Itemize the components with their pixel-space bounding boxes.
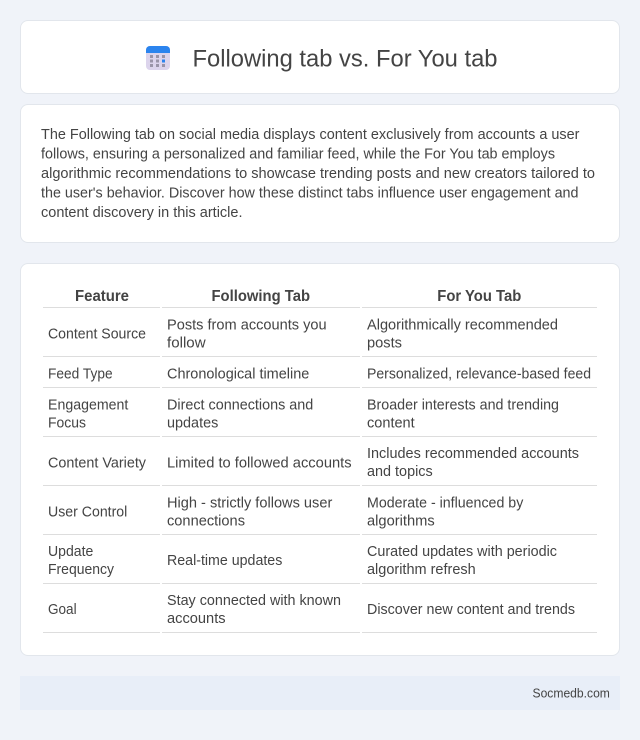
row: user control: User Control	[48, 504, 127, 520]
row: update frequency: Curated updates with periodic	[367, 544, 557, 560]
icon: calendar	[146, 46, 170, 70]
row: user control: connections	[167, 513, 245, 529]
panel: comparison table	[20, 263, 620, 656]
intro text: follows, ensuring a personalized and familiar feed, while the For You tab employs	[41, 146, 555, 162]
row: engagement focus: Broader interests and trending	[367, 397, 559, 413]
intro text: the user's behavior. Discover how these distinct tabs influence user engagement and	[41, 186, 578, 202]
title: Following tab vs. For You tab	[192, 46, 498, 72]
row: feed type: Chronological timeline	[167, 366, 309, 382]
row: content variety: Includes recommended accounts	[367, 446, 579, 462]
row: engagement focus: Direct connections and	[167, 397, 313, 413]
table header	[75, 288, 522, 305]
footer text: Socmedb.com	[532, 686, 610, 700]
intro text: The Following tab on social media displays content exclusively from accounts a user	[41, 127, 580, 143]
row: update frequency: Real-time updates	[167, 553, 282, 569]
row: update frequency: algorithm refresh	[367, 562, 476, 578]
row: user control: algorithms	[367, 513, 435, 529]
row: user control	[48, 495, 524, 529]
row: feed type	[48, 366, 591, 382]
row: goal: accounts	[167, 611, 226, 627]
panel: title card	[20, 20, 620, 94]
row: engagement focus: Focus	[48, 415, 86, 431]
row: user control: High - strictly follows user	[167, 495, 332, 511]
panel: introduction	[20, 104, 620, 243]
row: update frequency: Update	[48, 544, 93, 560]
row: content source: posts	[367, 335, 402, 351]
row: goal	[48, 593, 575, 627]
intro text	[41, 127, 595, 221]
row: content variety: Content Variety	[48, 455, 147, 471]
intro text: content discovery in this article.	[41, 205, 243, 221]
row: content variety	[48, 446, 579, 480]
row: content variety: and topics	[367, 464, 433, 480]
row: content source: Posts from accounts you	[167, 317, 327, 333]
row: content source: follow	[167, 335, 206, 351]
footer bar	[20, 676, 620, 710]
row: engagement focus: content	[367, 415, 415, 431]
row: goal: Goal	[48, 602, 77, 618]
row: update frequency	[48, 544, 557, 578]
row: feed type: Personalized, relevance-based feed	[367, 366, 591, 382]
row: feed type: Feed Type	[48, 366, 113, 382]
row: update frequency: Frequency	[48, 562, 115, 578]
row: engagement focus	[48, 397, 559, 431]
row: user control: Moderate - influenced by	[367, 495, 524, 511]
table header: Feature	[75, 288, 129, 305]
row: content source: Algorithmically recommended	[367, 317, 558, 333]
row: engagement focus: Engagement	[48, 397, 128, 413]
table header: For You Tab	[437, 288, 522, 305]
intro text: algorithmic recommendations to showcase trending posts and new creators tailored to	[41, 166, 595, 182]
row: goal: Stay connected with known	[167, 593, 341, 609]
row: content variety: Limited to followed accounts	[167, 455, 352, 471]
row: content source	[48, 317, 558, 351]
row: goal: Discover new content and trends	[367, 602, 575, 618]
row: engagement focus: updates	[167, 415, 218, 431]
table header: Following Tab	[212, 288, 310, 305]
row: content source: Content Source	[48, 326, 146, 342]
